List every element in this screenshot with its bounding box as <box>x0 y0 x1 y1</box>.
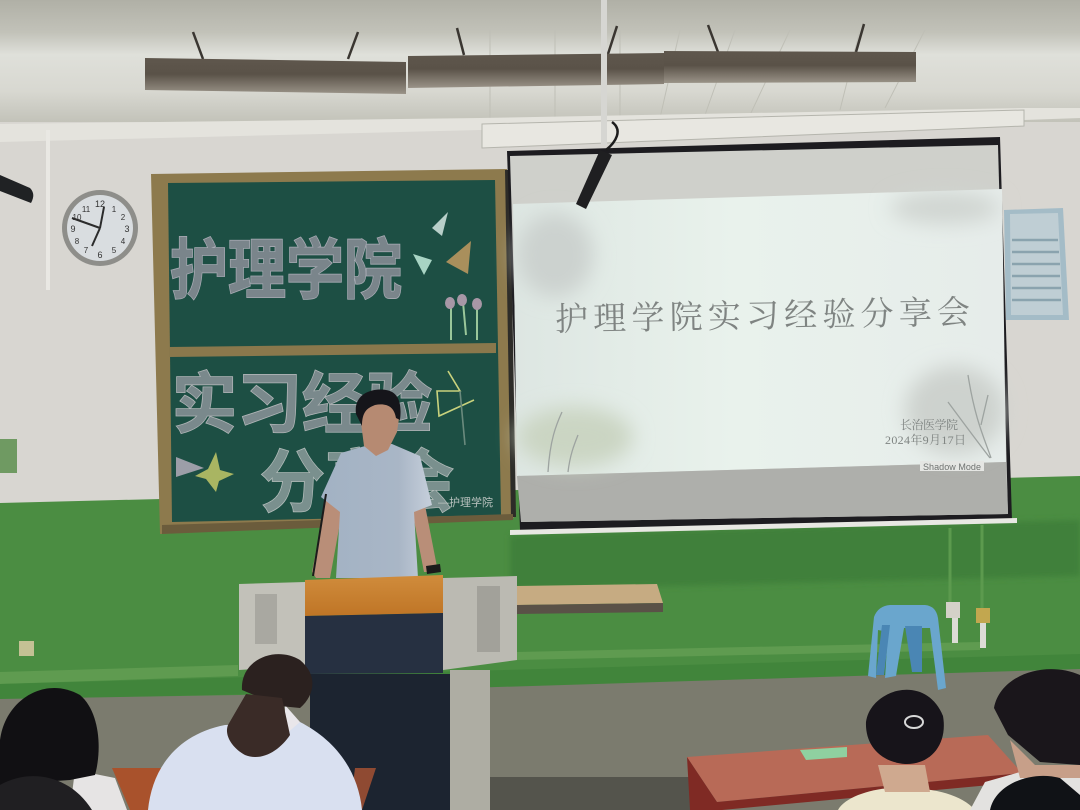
blackboard signature: —护理学院 <box>438 495 493 509</box>
student desks <box>112 735 1022 810</box>
projection screen <box>507 137 1017 535</box>
wall clock: 6 <box>97 250 103 260</box>
chalk flowers <box>445 294 482 340</box>
chalk star and comet <box>176 452 234 492</box>
Shadow Mode label: Shadow Mode <box>923 462 981 472</box>
wall sockets <box>19 525 990 656</box>
ceiling lamps <box>145 24 916 94</box>
hanging microphone <box>576 0 618 209</box>
wall clock: 11 <box>82 205 91 214</box>
wall clock: 3 <box>124 224 130 234</box>
left wall speaker and small box <box>0 175 33 473</box>
slide subtitle: school and date: 长治医学院 <box>900 418 958 432</box>
wall clock: 8 <box>75 237 80 246</box>
wall clock <box>62 190 138 266</box>
chalk paper planes <box>413 212 471 275</box>
wall clock: 5 <box>112 246 117 255</box>
floor <box>0 669 1080 810</box>
wall clock: 2 <box>121 213 126 222</box>
chalk constellation <box>437 371 474 445</box>
wall clock: 10 <box>73 213 82 222</box>
blue plastic stool <box>868 605 946 690</box>
notice poster <box>1004 208 1069 320</box>
green lower wall <box>0 476 1080 700</box>
lectern <box>239 575 517 810</box>
wall clock: 9 <box>70 224 76 234</box>
slide subtitle: school and date: 2024年9月17日 <box>885 432 966 447</box>
blackboard heading: 实习经验: 实习经验 <box>172 367 432 441</box>
wall clock: 1 <box>112 205 117 214</box>
blackboard heading: 分享会: 分享会 <box>260 445 454 521</box>
slide plant drawings <box>548 375 991 472</box>
slide watercolor decorations <box>517 192 1005 467</box>
back wall <box>0 108 1080 510</box>
slide subtitle: school and date <box>885 418 966 447</box>
wall clock: 4 <box>121 237 126 246</box>
blackboard frame <box>151 169 516 534</box>
wall clock: 7 <box>84 246 89 255</box>
ceiling <box>0 0 1080 130</box>
bench behind lectern <box>517 584 663 614</box>
blackboard heading: 护理学院: 护理学院 <box>170 233 402 307</box>
wall clock: 12 <box>95 199 105 209</box>
speaker: man in grey polo <box>312 390 441 578</box>
students in the foreground <box>0 654 1080 810</box>
slide title: 护理学院实习经验分享会 <box>555 294 970 339</box>
